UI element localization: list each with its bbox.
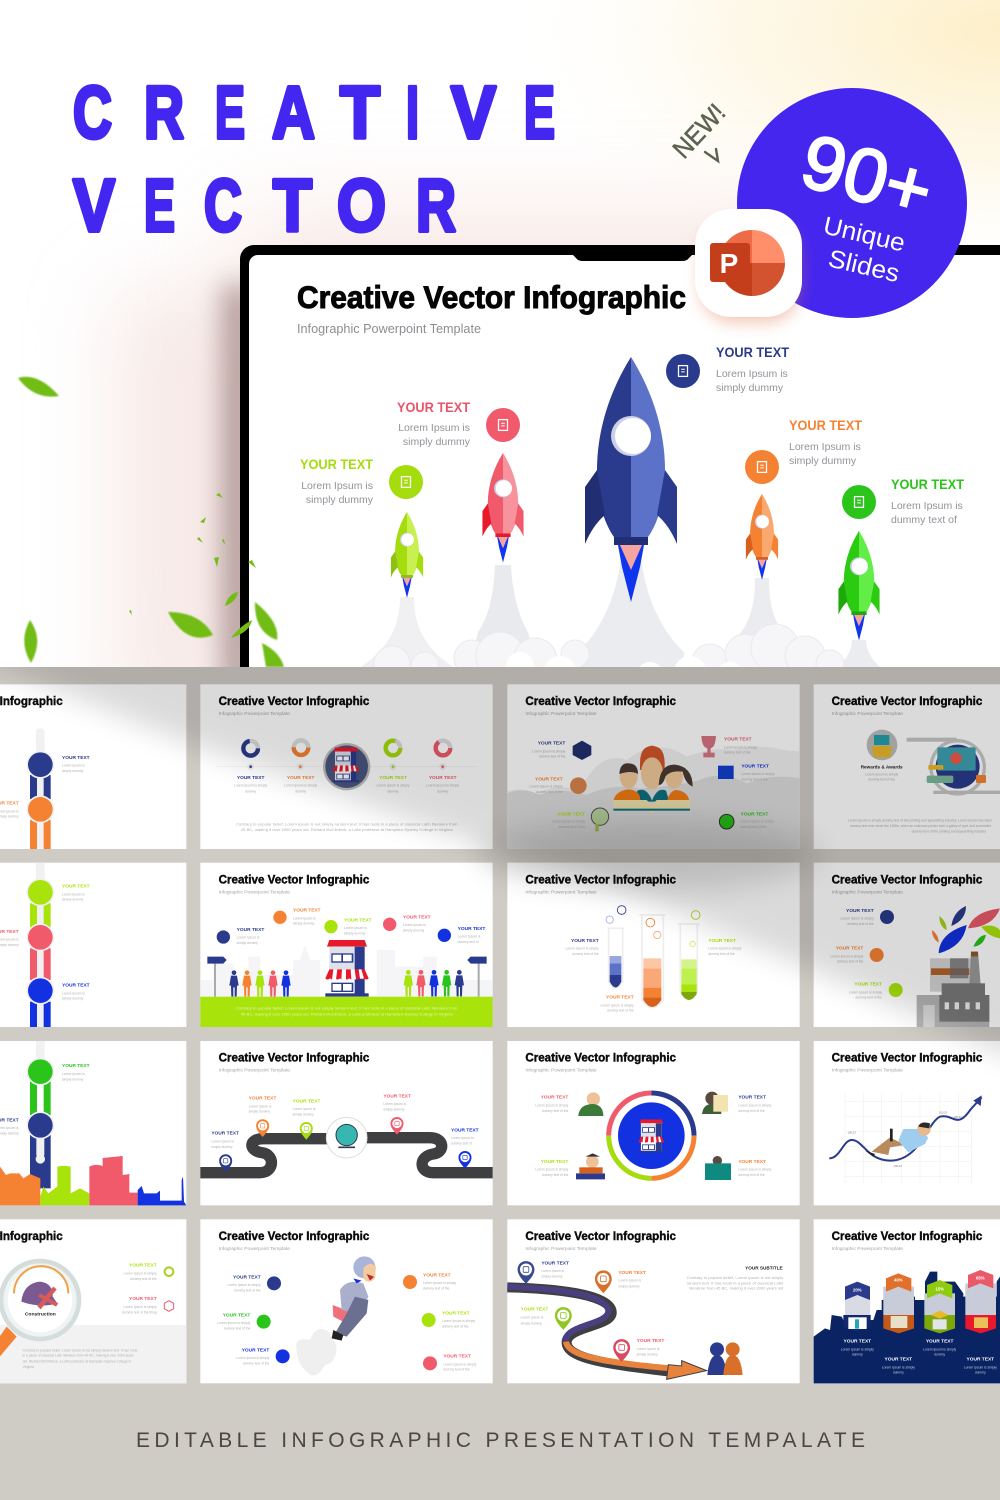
slide: store and people: simply dummy: [403, 928, 425, 932]
slide: circular store: dummy text of the: [542, 1109, 568, 1113]
slide: construction magnifier: Lorem Ipsum is simply: [124, 1305, 157, 1309]
slide: rewards and awards: dummy text ever since the 1500s, when an unknown printer took a galley of type and scrambled: [850, 824, 991, 828]
slide: circular store: Lorem Ipsum is simply: [738, 1104, 772, 1108]
slide: jetpack astronaut: [200, 1219, 493, 1383]
slide: road with globe: Lorem Ipsum is: [451, 1136, 474, 1140]
slide: construction magnifier: YOUR TEXT: [129, 1263, 157, 1269]
slide: test tubes: Creative Vector Infographic: [525, 873, 677, 886]
slide: store and people: simply dummy: [344, 931, 366, 935]
slide: growth chart: [814, 1041, 1000, 1205]
title line 2: O: [337, 164, 386, 247]
slide: store timeline: dummy: [437, 789, 448, 793]
slide: winding road: Creative Vector Infographic: [525, 1230, 677, 1243]
slide: education: YOUR TEXT: [741, 811, 768, 817]
badge caption: Unique: [821, 212, 908, 258]
slide: winding road: YOUR TEXT: [541, 1260, 569, 1266]
slide: timeline 2: simply dummy: [62, 997, 84, 1001]
slide: store and people: YOUR TEXT: [293, 908, 321, 914]
slide: city percentages: Lorem Ipsum is simply: [882, 1365, 915, 1369]
slide: jetpack astronaut: Lorem Ipsum is simply: [423, 1281, 456, 1285]
main slide subtitle: Infographic Powerpoint Template: [297, 321, 481, 336]
slide: test tubes: Lorem Ipsum is simply: [708, 947, 742, 951]
slide: store timeline: 45 BC, making it over 2000 years old. Richard McClintock, a Latin professor at Hampden-Sydney College in Virginia: [241, 828, 453, 832]
slide: store and people: YOUR TEXT: [344, 918, 372, 924]
slide: store timeline: Lorem Ipsum is simply: [426, 784, 460, 788]
slide: rewards and awards: [814, 684, 1000, 849]
slide: education: [507, 684, 800, 849]
slide: education: YOUR TEXT: [538, 741, 565, 747]
title line 1: C: [73, 71, 112, 154]
slide: jetpack astronaut: Creative Vector Infographic: [219, 1230, 370, 1243]
slide: growth chart: 100,23: [954, 1115, 962, 1119]
panel: slide grid background: [0, 667, 1000, 1500]
badge caption: [821, 212, 908, 288]
slide: timeline 2: Lorem Ipsum is: [62, 892, 85, 896]
slide: city percentages: Lorem Ipsum is simply: [841, 1347, 874, 1351]
slide: store and people: Contrary to popular belief, Lorem Ipsum is not simply random text. It has roots in a piece of classical Latin literature from: [236, 1007, 458, 1011]
slide: test tubes: Infographic Powerpoint Template: [525, 889, 597, 894]
slide: circular store: Lorem Ipsum is simply: [535, 1104, 569, 1108]
rocket: navy: [585, 357, 677, 602]
slide: winding road: YOUR TEXT: [521, 1307, 548, 1313]
slide: timeline 1: simply dummy: [62, 769, 84, 773]
slide: timeline skyline: [0, 1041, 186, 1205]
factory: [917, 952, 989, 1027]
slide: store and people: Creative Vector Infographic: [219, 873, 370, 886]
arrow: [705, 149, 718, 161]
slide: winding road: Lorem Ipsum is: [637, 1347, 660, 1351]
slide: city percentages: YOUR TEXT: [885, 1357, 912, 1363]
title line 2: T: [273, 164, 312, 247]
slide: circular store: Creative Vector Infographic: [525, 1052, 677, 1065]
slide: city percentages: dummy: [852, 1353, 863, 1357]
slide: jetpack astronaut: dummy text of the: [423, 1286, 450, 1290]
family icon: [613, 746, 693, 813]
slide: city percentages: [814, 1219, 1000, 1383]
title line 2: R: [416, 164, 456, 247]
slide: rewards and awards: Lorem Ipsum is simply: [865, 772, 899, 776]
slide: construction magnifier: old. Richard McClintock, a Latin professor at Hampden-Sydney College in: [23, 1360, 131, 1364]
title line 1: [73, 71, 555, 154]
callout: navy: Lorem Ipsum is: [716, 368, 788, 380]
slide: factory: Lorem Ipsum is simply: [841, 917, 874, 921]
slide: winding road: simply dummy: [637, 1353, 658, 1357]
slide: jetpack astronaut: YOUR TEXT: [242, 1347, 269, 1353]
callout: orange: [745, 417, 862, 484]
slide: winding road: Infographic Powerpoint Template: [525, 1246, 597, 1251]
slide: education: Lorem Ipsum is simply: [741, 820, 774, 824]
rocket: green: [838, 531, 880, 641]
slide: circular store: [507, 1041, 800, 1205]
icon: PowerPoint app: P: [720, 248, 738, 279]
title line 2: C: [204, 164, 242, 247]
title line 2: V: [73, 164, 115, 247]
title line 1: T: [340, 71, 380, 154]
callout: red: Lorem Ipsum is: [398, 422, 470, 434]
slide: jetpack astronaut: YOUR TEXT: [443, 1354, 471, 1360]
slide: circular store: dummy text of the: [738, 1173, 765, 1177]
slide: education: Lorem Ipsum is simply: [530, 785, 563, 789]
slide: jetpack astronaut: Infographic Powerpoint Template: [219, 1246, 291, 1251]
slide: store and people: simply dummy: [237, 941, 258, 945]
slide: factory: YOUR TEXT: [846, 908, 874, 914]
slide: jetpack astronaut: dummy text of the: [234, 1288, 261, 1292]
slide: education: dummy text of the: [741, 825, 767, 829]
slide: education: YOUR TEXT: [724, 737, 752, 743]
slide: road with globe: YOUR TEXT: [249, 1095, 276, 1101]
slide: store timeline: YOUR TEXT: [429, 775, 457, 781]
slide: timeline 1: [0, 684, 186, 849]
slide: store and people: 45 BC, making it over 2000 years old. Richard McClintock, a Latin professor at Hampden-Sydney College in Virginia: [241, 1012, 453, 1016]
slide: rewards and awards: Creative Vector Infographic: [832, 695, 983, 708]
slide: winding road: [507, 1219, 800, 1383]
slide: store timeline: dummy: [245, 789, 256, 793]
slide: winding road: YOUR TEXT: [618, 1270, 646, 1276]
slide: jetpack astronaut: Lorem Ipsum is simply: [236, 1356, 270, 1360]
slide: jetpack astronaut: Lorem Ipsum is simply: [443, 1362, 477, 1366]
slide: road with globe: YOUR TEXT: [451, 1127, 479, 1133]
callout: lime: simply dummy: [306, 494, 374, 506]
slide: road with globe: simply dummy: [293, 1112, 314, 1116]
slide: test tubes: YOUR TEXT: [571, 938, 599, 944]
slide: winding road: YOUR TEXT: [637, 1338, 664, 1344]
slide: timeline skyline: simply dummy: [62, 1077, 84, 1081]
slide: jetpack astronaut: dummy text of the: [224, 1326, 250, 1330]
title line 1: V: [451, 71, 496, 154]
slide: road with globe: Lorem Ipsum is: [293, 1107, 316, 1111]
callout: lime: YOUR TEXT: [300, 456, 373, 472]
slide: winding road: Lorem Ipsum is: [521, 1316, 544, 1320]
title line 2: E: [144, 164, 175, 247]
slide: store timeline: [200, 684, 493, 849]
slide: education: YOUR TEXT: [741, 763, 769, 769]
slide: circular store: Lorem Ipsum is simply: [738, 1168, 772, 1172]
slide: factory: YOUR TEXT: [854, 982, 882, 988]
callout: navy: YOUR TEXT: [716, 344, 789, 360]
slide: construction magnifier: dummy text of the thing: [122, 1310, 157, 1314]
slide: construction magnifier: YOUR TEXT: [129, 1296, 157, 1302]
slide: jetpack astronaut: Lorem Ipsum is simply: [442, 1319, 475, 1323]
slide: city percentages: dummy: [934, 1353, 945, 1357]
slide: road with globe: Creative Vector Infographic: [219, 1052, 370, 1065]
slide: road with globe: simply dummy: [249, 1110, 270, 1114]
slide: store timeline: Lorem Ipsum is simply: [376, 784, 410, 788]
callout: green: dummy text of: [891, 514, 957, 526]
slide: jetpack astronaut: YOUR TEXT: [442, 1310, 470, 1316]
slide: store timeline: Lorem Ipsum is simply: [284, 784, 318, 788]
slide: rewards and awards: Lorem Ipsum is simply dummy text of the printing and typesetting industry. Lorem Ipsum has been: [848, 819, 992, 823]
slide: construction magnifier: in a piece of classical Latin literature from 45 BC, making it over 2000 years: [23, 1354, 134, 1358]
slide: jetpack astronaut: YOUR TEXT: [233, 1274, 261, 1280]
slide: city percentages: Infographic Powerpoint Template: [832, 1246, 904, 1251]
callout: green: Lorem Ipsum is: [891, 500, 963, 512]
people: [707, 1342, 743, 1375]
slide: factory: Creative Vector Infographic: [832, 873, 983, 886]
title: Creative Vector: [73, 71, 555, 247]
slide: store and people: Lorem Ipsum is: [344, 926, 367, 930]
handwritten new label: NEW!: [666, 98, 731, 164]
slide: circular store: Infographic Powerpoint Template: [525, 1068, 597, 1073]
slide: test tubes: dummy text of the: [607, 1009, 634, 1013]
decorative leaves: [18, 377, 284, 667]
slide: road with globe: Infographic Powerpoint Template: [219, 1068, 291, 1073]
slide: circular store: dummy text of the: [542, 1173, 568, 1177]
callout: red: [397, 399, 520, 448]
slide: factory: dummy text of the: [847, 922, 874, 926]
slide: road with globe: Lorem Ipsum is: [249, 1104, 272, 1108]
slide: jetpack astronaut: Lorem Ipsum is simply: [228, 1283, 261, 1287]
slide: road with globe: simply dummy: [211, 1145, 233, 1149]
slide: city percentages: Creative Vector Infographic: [832, 1230, 983, 1243]
man reclining: [865, 1122, 931, 1157]
slide: rewards and awards: dummy text of the: [868, 778, 895, 782]
title line 1: A: [272, 71, 315, 154]
slide: store timeline: YOUR TEXT: [287, 775, 315, 781]
slide: city percentages: 15%: [935, 1286, 944, 1291]
slide: circular store: YOUR TEXT: [738, 1159, 766, 1165]
slide: city percentages: dummy: [975, 1371, 986, 1375]
slide: store and people: Lorem Ipsum is: [237, 936, 260, 940]
slide: education: dummy text of the: [539, 755, 565, 759]
main slide screen: [249, 255, 1000, 705]
slide: education: Creative Vector Infographic: [525, 695, 677, 708]
slide: growth chart: Infographic Powerpoint Template: [832, 1068, 904, 1073]
rocket smoke and clouds: [361, 545, 880, 690]
slide: winding road: simply dummy: [541, 1275, 563, 1279]
rocket: orange: [746, 494, 778, 580]
slide: winding road: YOUR SUBTITLE: [745, 1266, 783, 1271]
slide: store timeline: Infographic Powerpoint Template: [219, 711, 291, 716]
slide: winding road: simply dummy: [618, 1284, 640, 1288]
slide: timeline 1: YOUR TEXT: [62, 755, 90, 761]
slide: construction magnifier: dummy text of the: [130, 1277, 157, 1281]
slide: city percentages: 40%: [894, 1278, 903, 1283]
laptop frame: [240, 245, 1000, 705]
title line 1: R: [144, 71, 184, 154]
callout: lime: [300, 456, 423, 506]
leaves: [932, 906, 1000, 953]
slide: growth chart: 100,23: [894, 1164, 902, 1168]
slide: city percentages: YOUR TEXT: [967, 1357, 994, 1363]
slide: circular store: YOUR TEXT: [738, 1095, 766, 1101]
slide: jetpack astronaut: Lorem Ipsum is simply: [217, 1321, 251, 1325]
slide: timeline 2: YOUR TEXT: [62, 983, 90, 989]
slide: winding road: literature from 45 BC, making it over 2000 years old: [689, 1287, 784, 1291]
slide: test tubes: YOUR TEXT: [606, 995, 634, 1001]
slide: timeline 1: Lorem Ipsum is: [62, 764, 85, 768]
slide: city percentages: 20%: [853, 1287, 862, 1292]
title line 2: [73, 164, 456, 247]
slide: road with globe: YOUR TEXT: [293, 1098, 320, 1104]
slide: factory: YOUR TEXT: [836, 946, 863, 952]
footer caption: EDITABLE INFOGRAPHIC PRESENTATION TEMPALATE: [136, 1429, 865, 1452]
icon: PowerPoint app: [695, 209, 802, 322]
slide: store timeline: Creative Vector Infographic: [219, 695, 370, 708]
slide: construction magnifier: Virginia: [23, 1365, 34, 1369]
panel: laptop with main slide: [240, 245, 1000, 705]
slide: store and people: dummy text of: [458, 940, 479, 944]
slide: test tubes: dummy text of the: [708, 952, 735, 956]
slide: factory: dummy text of the: [856, 996, 882, 1000]
badge number: 90+: [793, 118, 941, 234]
slide: factory: [814, 863, 1000, 1027]
rocket: lime: [391, 512, 423, 598]
slide: test tubes: YOUR TEXT: [708, 938, 736, 944]
astronaut: [332, 1256, 376, 1341]
slide: construction magnifier: Lorem Ipsum is simply: [124, 1272, 157, 1276]
slide: factory: dummy text of the: [837, 960, 863, 964]
slide: city percentages: YOUR TEXT: [926, 1338, 954, 1344]
slide: store and people: Lorem Ipsum is: [458, 935, 481, 939]
slide: rewards and awards: dummy text of the printing and typesetting industry: [912, 829, 986, 833]
slide: road with globe: YOUR TEXT: [211, 1131, 239, 1137]
skyline: [0, 1156, 186, 1205]
slide: growth chart: 100,23: [939, 1111, 948, 1115]
slide: store timeline: dummy: [295, 789, 306, 793]
slide: construction magnifier: [0, 1219, 186, 1383]
slide: test tubes: Lorem Ipsum is simply: [566, 947, 599, 951]
title line 1: I: [406, 71, 419, 154]
slide: store timeline: YOUR TEXT: [237, 775, 265, 781]
slide: education: Lorem Ipsum is simply: [532, 749, 566, 753]
main slide title: Creative Vector Infographic: [297, 279, 686, 315]
slide: education: Lorem Ipsum is simply: [552, 820, 585, 824]
slide: jetpack astronaut: dummy text of the: [443, 1368, 470, 1372]
laptop notch: [573, 255, 692, 261]
slide: city percentages: 65%: [976, 1276, 985, 1281]
slide: jetpack astronaut: YOUR TEXT: [223, 1312, 250, 1318]
slide: store and people: YOUR TEXT: [403, 915, 431, 921]
slide: education: YOUR TEXT: [535, 776, 563, 782]
slide: city percentages: YOUR TEXT: [844, 1338, 871, 1344]
slide: education: Lorem Ipsum is simply: [741, 772, 775, 776]
slide: store and people: YOUR TEXT: [458, 926, 485, 932]
callout: green: [842, 476, 964, 526]
badge: 90+ unique slides: [737, 88, 967, 318]
slide: construction magnifier: Contrary to popular belief, Lorem Ipsum is not simply random text. It has roots: [23, 1348, 138, 1352]
slide: construction magnifier: Construction: [25, 1311, 56, 1317]
slide: test tubes: Lorem Ipsum is simply: [601, 1003, 634, 1007]
callout: navy: [666, 344, 789, 394]
slide: winding road: simply dummy: [521, 1321, 542, 1325]
slide: test tubes: dummy text of the: [572, 952, 599, 956]
slide: timeline 2: simply dummy: [62, 898, 84, 902]
slide: winding road: Contrary to popular belief, Lorem Ipsum is not simply: [687, 1276, 784, 1280]
slide: store and people: YOUR TEXT: [237, 927, 264, 933]
slide: education: dummy text of the: [741, 777, 768, 781]
title line 1: E: [524, 71, 555, 154]
slide: jetpack astronaut: YOUR TEXT: [423, 1272, 451, 1278]
slide: circular store: Lorem Ipsum is simply: [535, 1168, 569, 1172]
road: [507, 1287, 707, 1379]
slide: circular store: YOUR TEXT: [541, 1095, 568, 1101]
slide: city percentages: Lorem Ipsum is simply: [964, 1365, 997, 1369]
slide: growth chart: Creative Vector Infographic: [832, 1052, 983, 1065]
city silhouette: [814, 1272, 1000, 1383]
slide: road with globe: simply dummy: [383, 1107, 405, 1111]
slide: timeline 2: Lorem Ipsum is: [62, 991, 85, 995]
slide: store and people: Lorem Ipsum is: [293, 916, 316, 920]
slide: factory: Lorem Ipsum is simply: [830, 954, 864, 958]
slide: education: Lorem Ipsum is simply: [724, 745, 757, 749]
slide: store timeline: Contrary to popular belief, Lorem Ipsum is not simply random text. It has roots in a piece of classical Latin literature from: [236, 822, 458, 826]
slide: store and people: Infographic Powerpoint Template: [219, 889, 291, 894]
slide: education: Infographic Powerpoint Template: [525, 711, 597, 716]
slide: rewards and awards: Rewards & Awards: [861, 764, 903, 769]
slide: store timeline: dummy: [388, 789, 399, 793]
slide: winding road: random text. It has roots in a piece of classical Latin: [687, 1281, 784, 1285]
callout: orange: Lorem Ipsum is: [789, 441, 861, 453]
slide: road with globe: YOUR TEXT: [383, 1093, 411, 1099]
hero background: [0, 0, 1000, 730]
slide: timeline 2: [0, 863, 186, 1027]
slide: jetpack astronaut: dummy text of the: [442, 1324, 469, 1328]
slide: store timeline: YOUR TEXT: [379, 775, 407, 781]
callout: navy: simply dummy: [716, 382, 784, 394]
slide: education: YOUR TEXT: [557, 811, 585, 817]
slide: road with globe: Lorem Ipsum is: [211, 1140, 234, 1144]
slide: test tubes: [507, 863, 800, 1027]
slide: jetpack astronaut: dummy text of the: [243, 1361, 269, 1365]
slide: education: dummy text of the: [724, 751, 751, 755]
slide: store and people: simply dummy: [293, 922, 315, 926]
slide: timeline skyline: Lorem Ipsum is: [62, 1072, 85, 1076]
slide: education: dummy text of the: [536, 790, 563, 794]
slide: store timeline: Lorem Ipsum is simply: [234, 784, 268, 788]
callout: green: YOUR TEXT: [891, 476, 964, 492]
slide: circular store: YOUR TEXT: [541, 1159, 568, 1165]
callout: red: YOUR TEXT: [397, 399, 470, 415]
title line 1: E: [215, 71, 245, 154]
slide: rewards and awards: Infographic Powerpoint Template: [832, 711, 904, 716]
slide: city percentages: Lorem Ipsum is simply: [923, 1347, 957, 1351]
rocket: red: [482, 453, 524, 563]
slide: store and people: Lorem Ipsum is: [403, 923, 426, 927]
callout: orange: simply dummy: [789, 455, 857, 467]
slide: factory: Lorem Ipsum is simply: [849, 990, 882, 994]
slide: factory: Infographic Powerpoint Template: [832, 889, 904, 894]
slide: circular store: dummy text of the: [738, 1109, 765, 1113]
slide: store and people: [200, 863, 493, 1027]
slide: city percentages: dummy: [893, 1371, 904, 1375]
slide: road with globe: [200, 1041, 493, 1205]
slide: winding road: Lorem Ipsum is: [618, 1279, 641, 1283]
slide: winding road: Lorem Ipsum is: [541, 1269, 564, 1273]
callout: lime: Lorem Ipsum is: [301, 480, 373, 492]
callout: orange: YOUR TEXT: [789, 417, 862, 433]
badge caption: Slides: [826, 245, 902, 288]
callout: red: simply dummy: [403, 436, 471, 448]
slide: road with globe: Lorem Ipsum is: [383, 1102, 406, 1106]
slide: timeline skyline: YOUR TEXT: [62, 1063, 90, 1069]
slide: road with globe: dummy text of: [451, 1141, 472, 1145]
slide: timeline 2: YOUR TEXT: [62, 884, 90, 890]
slide: growth chart: 100,23: [848, 1131, 856, 1135]
slide: education: dummy text of the: [559, 825, 585, 829]
